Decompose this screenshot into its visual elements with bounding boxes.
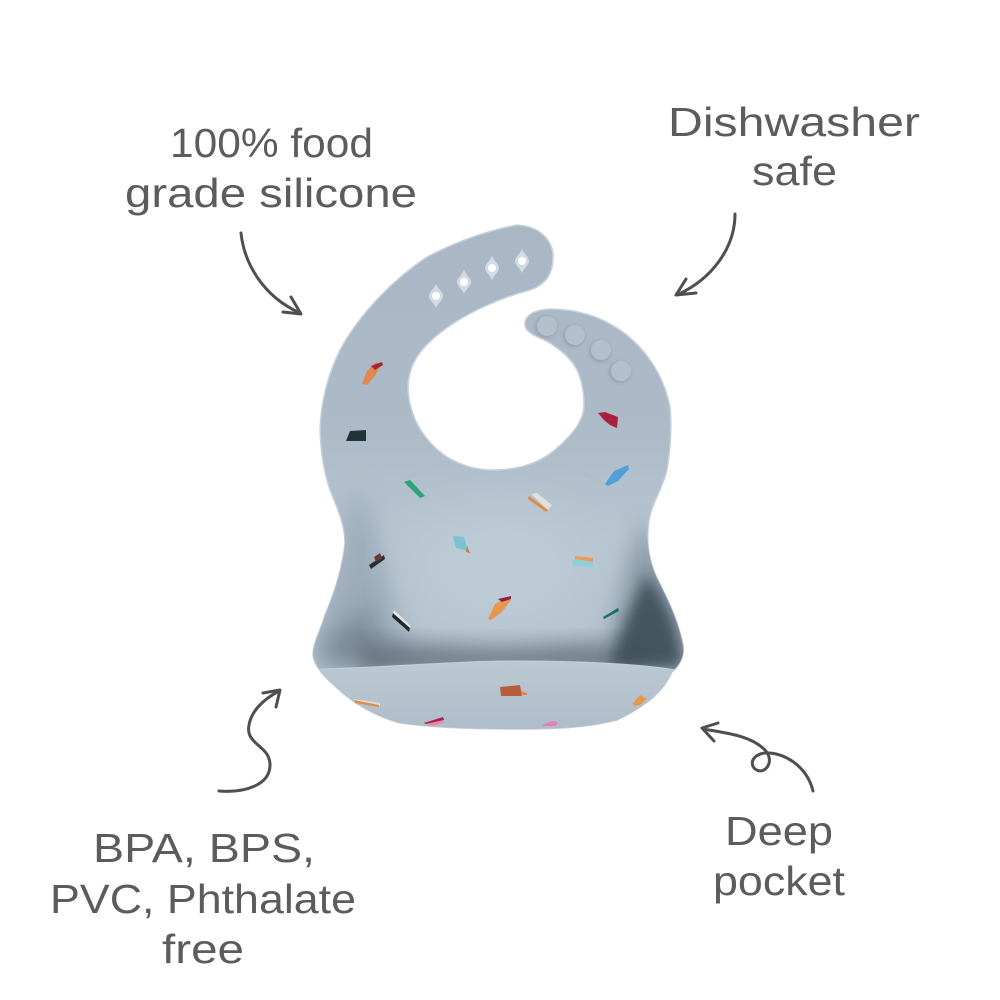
strap hole 2	[457, 270, 471, 294]
label: Dishwasher safe	[668, 99, 920, 194]
label: BPA, BPS, PVC, Phthalate free	[50, 825, 356, 972]
arrow: silicone to bib	[241, 233, 301, 314]
strap hole 4	[515, 249, 529, 273]
van bottom left	[354, 699, 380, 706]
truck red	[598, 412, 618, 428]
bib illustration	[300, 225, 690, 740]
van orange white	[531, 493, 552, 510]
label: Deep pocket	[713, 808, 846, 904]
car orange	[362, 362, 381, 385]
label: BPA, BPS, PVC, Phthalate free: BPA, BPS,	[93, 825, 315, 871]
van light blue	[453, 536, 468, 551]
car bottom pink	[542, 721, 558, 726]
snap buttons	[535, 316, 631, 383]
van grey	[392, 613, 410, 632]
arrow: deep pocket to bib	[702, 723, 813, 791]
infographic canvas	[54, 106, 920, 964]
car bottom magenta	[424, 717, 444, 724]
label: BPA, BPS, PVC, Phthalate free: PVC, Phthalate	[50, 876, 356, 922]
label: BPA, BPS, PVC, Phthalate free: free	[162, 926, 244, 972]
snap 3	[589, 340, 611, 362]
snap 2	[563, 325, 585, 347]
label: Deep pocket: pocket	[713, 858, 846, 904]
truck brown	[500, 685, 522, 696]
label: 100% food grade silicone: grade silicone	[125, 170, 417, 216]
strap hole 1	[429, 284, 443, 308]
snap 1	[535, 316, 557, 338]
van dark	[346, 430, 366, 441]
pocket shading	[313, 498, 684, 729]
label: Dishwasher safe: safe	[752, 148, 837, 194]
front pocket lip	[320, 662, 674, 729]
label: Deep pocket: Deep	[725, 808, 833, 854]
strap hole 3	[485, 256, 499, 280]
car pattern	[346, 362, 647, 726]
car peach	[488, 597, 511, 620]
bib body	[313, 225, 683, 729]
arrow: free to bib	[219, 690, 280, 791]
strap holes	[429, 249, 529, 308]
label: 100% food grade silicone	[125, 120, 417, 216]
car teal	[603, 608, 619, 619]
arrow: dishwasher to bib	[676, 214, 735, 295]
label: Dishwasher safe: Dishwasher	[668, 99, 920, 145]
van bottom right	[633, 695, 647, 706]
snap 4	[609, 361, 631, 383]
bus peach	[572, 559, 593, 567]
label: 100% food grade silicone: 100% food	[170, 120, 373, 166]
car blue	[605, 465, 629, 486]
jeep dark	[369, 555, 385, 569]
